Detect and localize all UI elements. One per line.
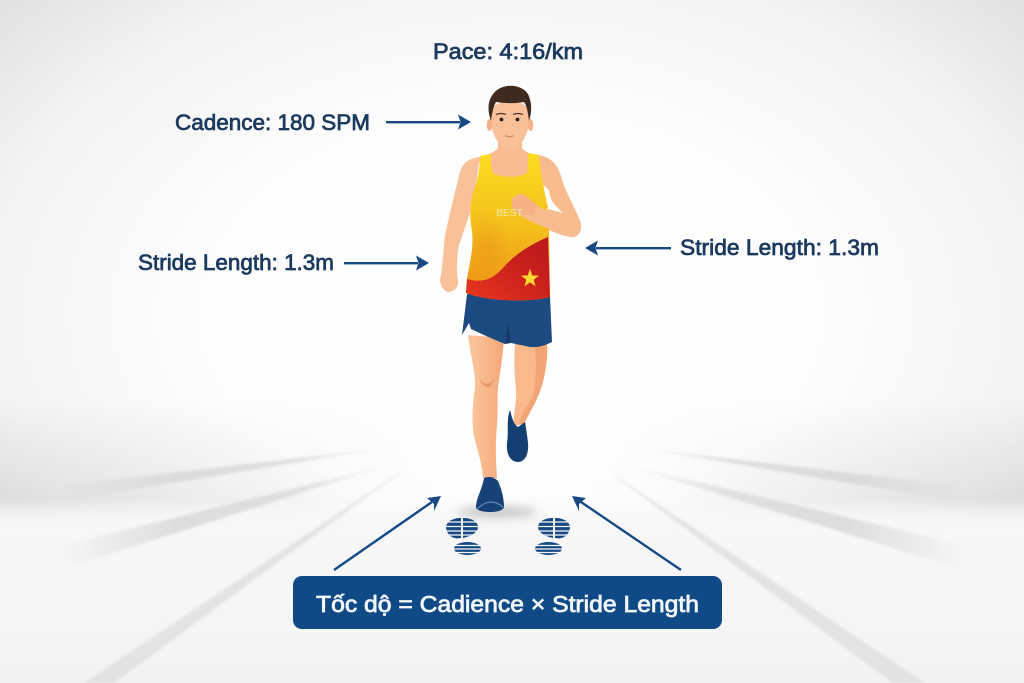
arrow: stride right [585,240,671,256]
chest logo: BEST [496,208,523,219]
shorts [462,294,552,347]
arrow: diagonal left [334,496,441,570]
title: pace: Pace: 4:16/km [433,39,583,64]
right hand over tank [512,194,537,215]
star [521,269,539,286]
arrow: stride left [344,256,429,270]
hair [489,86,531,121]
arrow: diagonal right [572,496,681,570]
label: stride length left: Stride Length: 1.3m [138,250,334,275]
label: cadence: Cadence: 180 SPM [175,110,370,135]
head [490,102,530,149]
tank top [466,153,550,300]
formula box [293,576,722,629]
formula box: Tốc dộ = Cadience × Stride Length [316,591,699,617]
back shoe [507,410,528,462]
arrow: cadence [386,114,471,130]
label: stride length right: Stride Length: 1.3m [680,235,879,260]
back leg [513,344,547,426]
runner figure [440,86,581,516]
left arm [440,157,480,292]
front shoe [476,477,504,512]
right arm [512,155,581,237]
red flag wave [466,237,550,300]
ground shadow [457,508,537,516]
track lines [45,447,985,683]
front leg [468,335,504,478]
neck [479,138,540,180]
footprint right [533,518,572,555]
face details [496,114,523,137]
footprint left [444,518,483,555]
